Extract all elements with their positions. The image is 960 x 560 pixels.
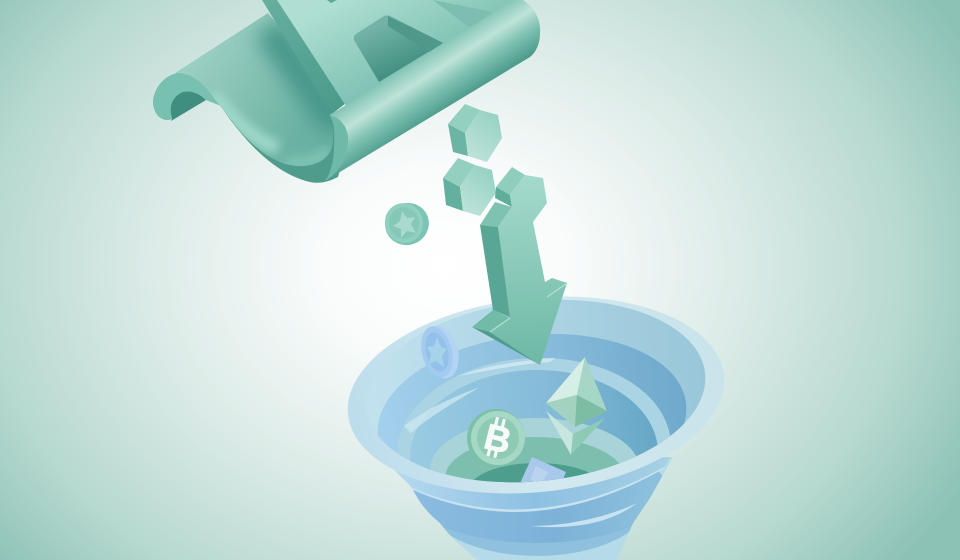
hexagon block two bbox=[443, 158, 496, 216]
star coin blue bbox=[416, 322, 464, 382]
surface shading bbox=[212, 28, 340, 163]
deep blue ring bbox=[378, 334, 686, 456]
bitcoin symbol: B bbox=[480, 415, 515, 462]
hexagon block one bbox=[448, 104, 502, 162]
green ring bbox=[446, 437, 619, 482]
left curl hollow bbox=[171, 91, 206, 121]
down arrow bbox=[472, 167, 567, 365]
dark strip beside letter bbox=[262, 0, 346, 114]
dark green pool bbox=[474, 463, 590, 482]
sheet thickness edge bbox=[153, 73, 346, 183]
funnel body bbox=[394, 457, 673, 560]
arrow cap top bbox=[496, 167, 525, 195]
dark fold band bbox=[268, 28, 340, 128]
panel darker stroke bbox=[433, 0, 493, 28]
arrow notch bbox=[480, 202, 512, 227]
ethereum diamond bbox=[546, 357, 607, 455]
blue cube bbox=[520, 457, 566, 482]
lower sheen bbox=[285, 150, 328, 163]
letter counter hole bbox=[354, 15, 443, 82]
pale ring bbox=[430, 418, 636, 474]
left curl lip bbox=[153, 73, 221, 120]
arrow notch shade bbox=[495, 187, 512, 207]
third tier bbox=[428, 500, 649, 556]
arrow light line left bbox=[490, 318, 510, 332]
funnel bbox=[348, 296, 724, 560]
letter panel bbox=[277, 0, 520, 106]
arrow light line right bbox=[547, 284, 566, 297]
panel top mark bbox=[327, 0, 337, 3]
funnel streak two bbox=[530, 503, 637, 527]
light fold band bbox=[212, 95, 278, 148]
arrow wing top bbox=[472, 310, 510, 332]
bitcoin coin bbox=[467, 409, 525, 467]
star coin green bbox=[379, 197, 435, 251]
funnel streak one bbox=[408, 467, 664, 510]
interior streak bbox=[458, 358, 555, 376]
second tier bbox=[408, 472, 662, 543]
funnel interior bbox=[378, 300, 706, 482]
roll end face bbox=[325, 115, 348, 181]
interior streak two bbox=[404, 387, 480, 433]
hole inner shadow bbox=[388, 16, 443, 52]
arrow side face bbox=[480, 225, 512, 318]
arrow underside bbox=[472, 327, 540, 365]
sheet curved surface bbox=[175, 13, 345, 166]
blue ring bbox=[410, 370, 658, 470]
arrow front face bbox=[490, 175, 567, 365]
inner wall bbox=[405, 300, 706, 436]
funnel rim bbox=[338, 279, 734, 511]
bottom band bbox=[394, 457, 673, 560]
upper tier above streak bbox=[404, 457, 670, 510]
rolled document sheet bbox=[153, 0, 540, 183]
light ring bbox=[398, 358, 670, 460]
paper roll bbox=[325, 0, 540, 181]
